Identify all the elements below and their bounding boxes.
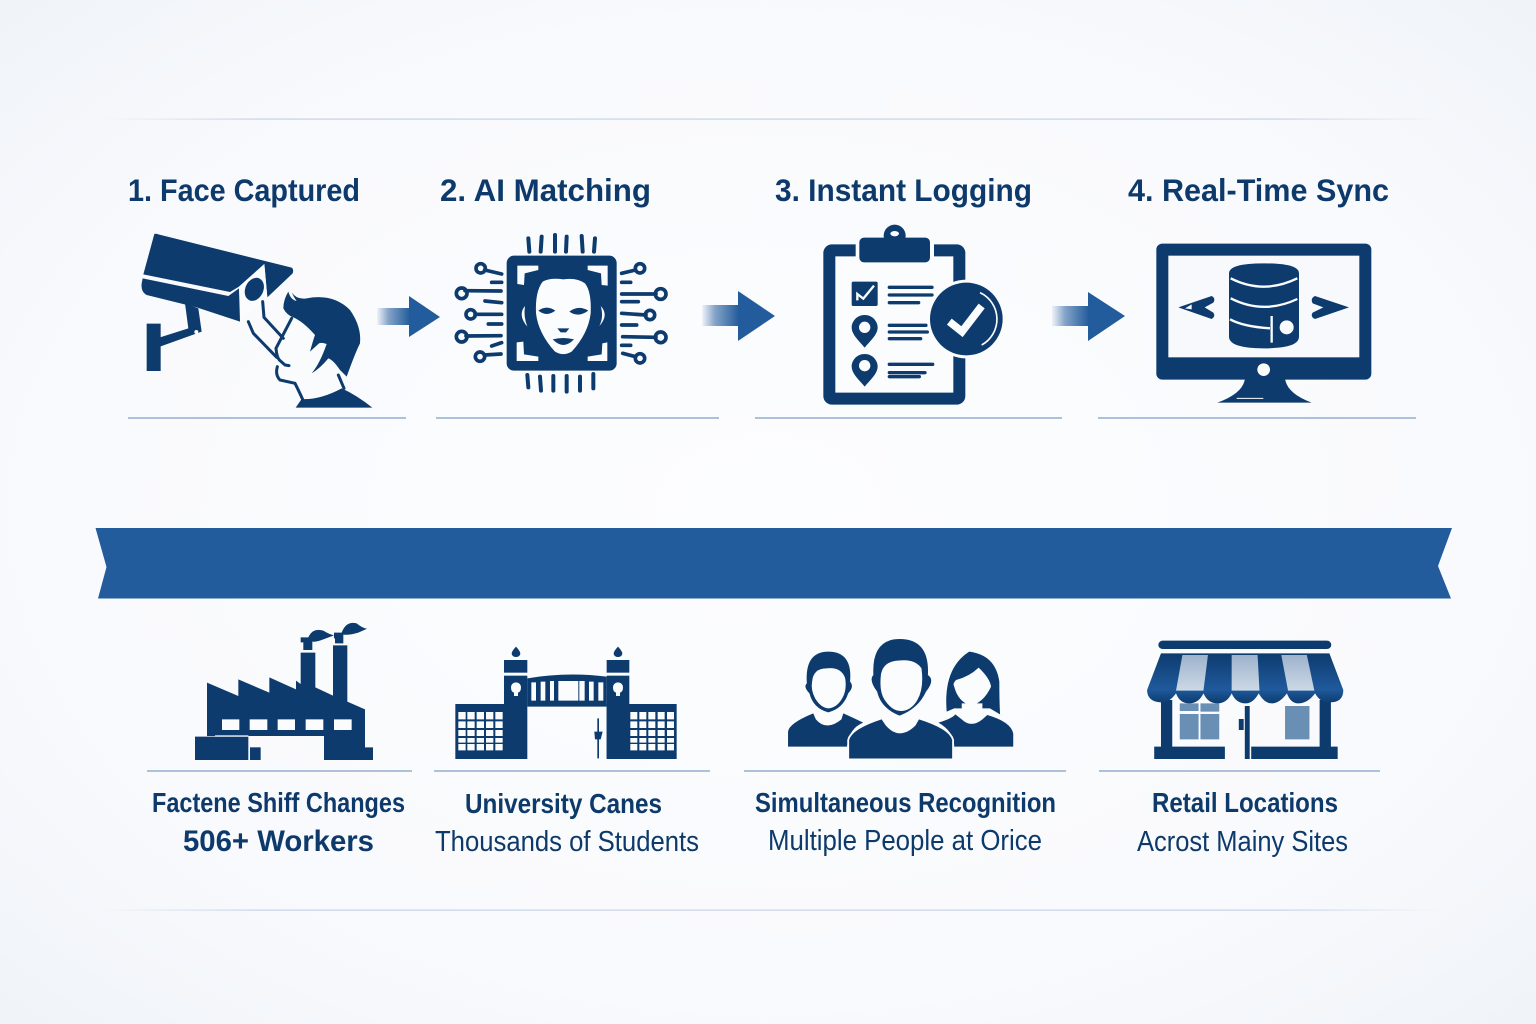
step 1: face captured bbox=[128, 172, 406, 418]
step 3: instant logging bbox=[755, 172, 1062, 418]
use case: university bbox=[434, 647, 710, 858]
label: university: University Canes bbox=[465, 788, 662, 819]
icon: factory bbox=[195, 623, 373, 760]
banner ribbon bbox=[96, 528, 1452, 598]
step 4: real-time sync bbox=[1098, 172, 1416, 418]
use case: simultaneous recognition bbox=[744, 639, 1066, 857]
heading: step 1: 1. Face Captured bbox=[128, 172, 360, 208]
arrow: step 3 to 4 bbox=[1052, 292, 1125, 341]
icon: storefront bbox=[1147, 641, 1343, 759]
icon: AI chip with face bbox=[456, 235, 666, 392]
label: retail locations: Retail Locations bbox=[1152, 787, 1338, 818]
detail: multiple people: Multiple People at Orice bbox=[768, 825, 1042, 857]
use case: retail bbox=[1099, 641, 1380, 858]
use case: factory bbox=[147, 623, 412, 858]
detail: students: Thousands of Students bbox=[435, 826, 699, 858]
icon: university gate bbox=[455, 647, 677, 759]
stat: workers: 506+ Workers bbox=[183, 825, 374, 858]
heading: step 4: 4. Real-Time Sync bbox=[1128, 172, 1389, 208]
label: factory shift changes: Factene Shiff Changes bbox=[152, 787, 405, 818]
icon: security camera scanning a face bbox=[142, 234, 372, 408]
label: simultaneous recognition: Simultaneous Recognition bbox=[755, 787, 1056, 818]
arrow: step 2 to 3 bbox=[702, 291, 775, 341]
arrow: step 1 to 2 bbox=[377, 296, 440, 337]
icon: monitor with database bbox=[1156, 244, 1371, 403]
heading: step 3: 3. Instant Logging bbox=[775, 172, 1032, 208]
detail: many sites: Acrost Mainy Sites bbox=[1137, 826, 1348, 858]
icon: clipboard checklist with check badge bbox=[829, 225, 1006, 399]
step 2: AI matching bbox=[436, 172, 719, 418]
icon: group of three people bbox=[788, 639, 1013, 759]
heading: step 2: 2. AI Matching bbox=[440, 172, 651, 208]
